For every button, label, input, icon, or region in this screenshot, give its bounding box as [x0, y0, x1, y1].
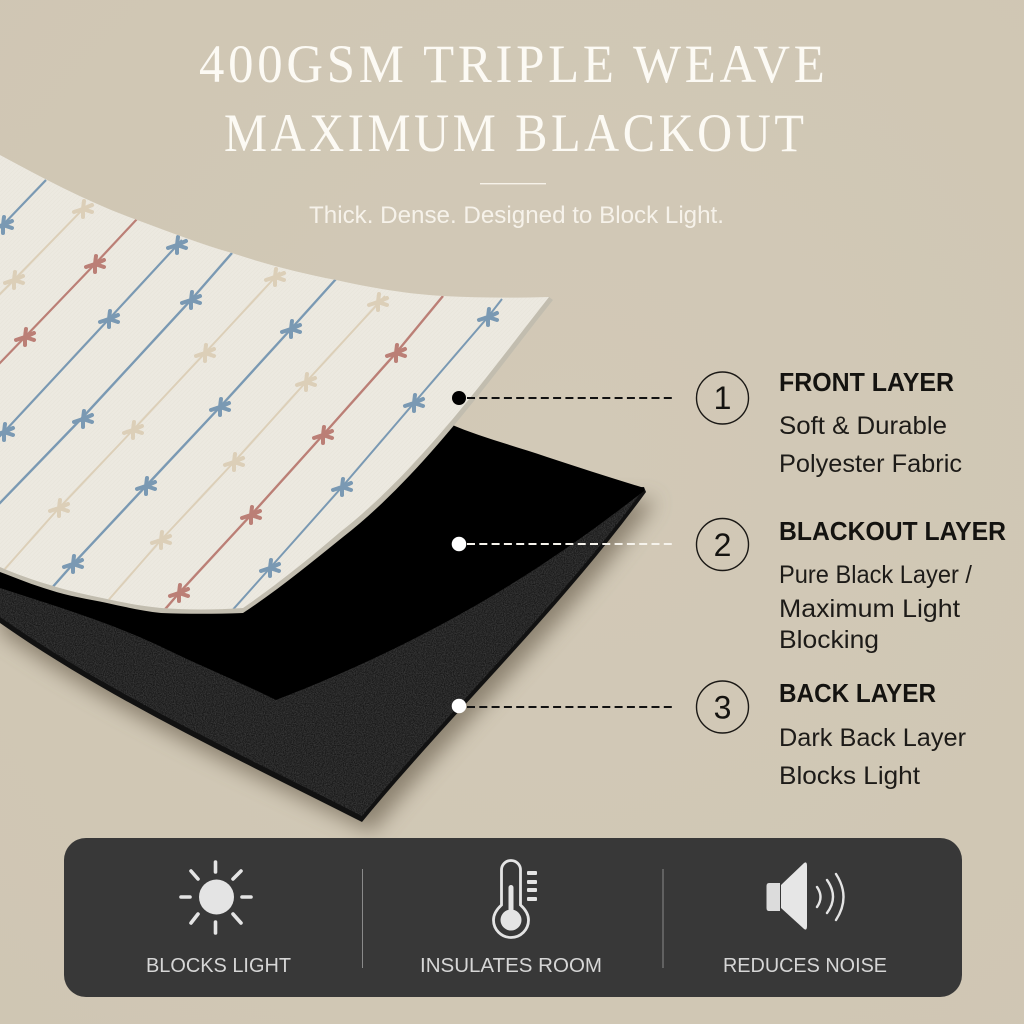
- title: 400GSM TRIPLE WEAVE: [199, 34, 828, 94]
- label: blackout layer: [779, 516, 1006, 654]
- label: back layer: Dark Back Layer: [779, 724, 966, 752]
- subtitle: Thick. Dense. Designed to Block Light.: [309, 202, 724, 229]
- front layer edge: [0, 297, 553, 614]
- panel dividers: [362, 869, 664, 968]
- callout 1: front layer pointer: [451, 390, 675, 406]
- title: MAXIMUM BLACKOUT: [224, 103, 808, 163]
- label: blackout layer: Pure Black Layer /: [779, 561, 972, 589]
- label: front layer: FRONT LAYER: [779, 367, 954, 397]
- icon: sun: [181, 862, 251, 933]
- icon: speaker: [766, 862, 844, 930]
- callout 2: blackout layer pointer: [452, 537, 675, 551]
- label: front layer: Soft & Durable: [779, 412, 947, 440]
- red stripes: [0, 219, 443, 614]
- number badge 1: [696, 372, 748, 424]
- blue stripes: [0, 180, 502, 614]
- back layer: [0, 487, 646, 822]
- label: blackout layer: Blocking: [779, 626, 879, 654]
- caption: blocks light: BLOCKS LIGHT: [146, 955, 291, 977]
- front layer face: [0, 155, 549, 610]
- label: back layer: BACK LAYER: [779, 678, 936, 708]
- label: front layer: Polyester Fabric: [779, 450, 962, 478]
- number badge 3: 3: [714, 690, 731, 726]
- caption: insulates room: INSULATES ROOM: [420, 955, 602, 977]
- icon: thermometer: [494, 860, 537, 938]
- fabric stripes and flowers: [0, 179, 503, 609]
- blackout layer: [0, 424, 644, 700]
- number badge 2: [696, 518, 748, 570]
- shadow beneath fabric: [0, 500, 656, 832]
- label: blackout layer: Maximum Light: [779, 595, 960, 623]
- title: [199, 34, 828, 163]
- front layer: [0, 150, 560, 620]
- label: back layer: [779, 678, 966, 790]
- number badge 2: 2: [714, 527, 731, 563]
- label: back layer: Blocks Light: [779, 762, 920, 790]
- label: front layer: [779, 367, 962, 478]
- caption: reduces noise: REDUCES NOISE: [723, 955, 887, 977]
- number badge 3: [696, 681, 748, 733]
- number badge 1: 1: [714, 380, 731, 416]
- callout 3: back layer pointer: [452, 699, 675, 713]
- tan stripes: [0, 201, 387, 604]
- benefits panel: [64, 838, 962, 997]
- fabric layers illustration: [0, 150, 656, 832]
- label: blackout layer: BLACKOUT LAYER: [779, 516, 1006, 546]
- title divider line: [480, 183, 546, 184]
